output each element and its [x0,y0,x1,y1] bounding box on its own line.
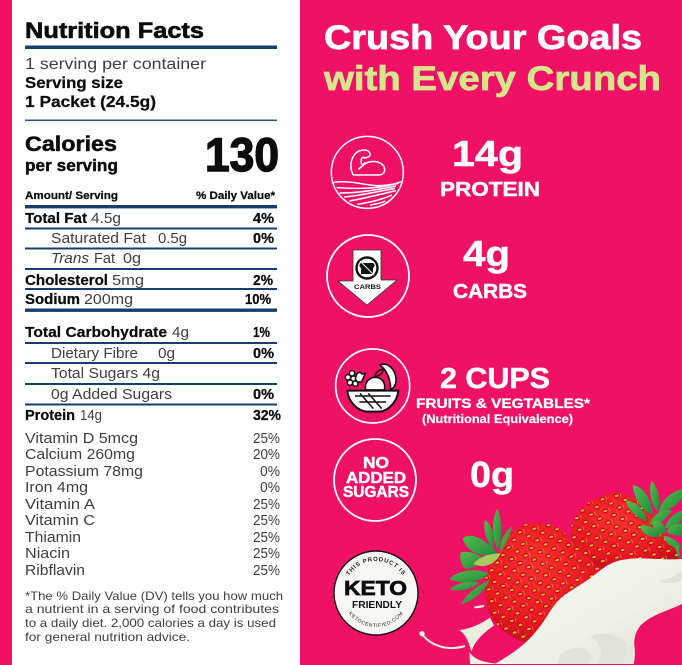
nutrient rows: 0g Added Sugars [51,387,172,403]
vitamins and minerals list: Iron 4mg [25,480,88,496]
nutrient rows: Saturated Fat [51,231,146,247]
footnote [25,589,283,644]
icon: no added sugars: NO [363,455,389,472]
vitamins and minerals list: 25% [253,431,280,447]
stat: 4g carbs: 4g [463,233,510,274]
back strawberry [571,493,679,568]
vitamins and minerals list: Vitamin C [25,513,95,529]
badge: keto friendly [333,550,419,636]
icon: carbs down arrow: CARBS [354,284,382,291]
footnote: for general nutrition advice. [25,630,190,644]
vitamins and minerals list: 25% [253,513,280,529]
calories [25,128,279,181]
nutrient rows: 32% [253,408,281,424]
stat: 4g carbs: CARBS [453,281,527,303]
nutrient rows: 0g [123,251,141,267]
nutrient rows [25,211,281,424]
vitamins and minerals list: 25% [253,546,280,562]
stat: 2 cups fruits and vegetables [416,363,591,426]
column headers [25,190,276,202]
vitamins and minerals list: Vitamin A [25,497,95,513]
serving information: 1 Packet (24.5g) [25,94,156,111]
nutrient rows: 10% [245,292,271,308]
stat: 4g carbs [453,233,527,303]
illustration: strawberries and milk splash [419,481,682,664]
nutrient rows: 5mg [112,273,144,289]
icon: no added sugars: ADDED [346,470,406,487]
title: crush your goals [323,19,661,98]
stat: 2 cups fruits and vegetables: (Nutritional Equivalence) [422,414,573,426]
nutrient rows: Total Carbohydrate [25,325,167,341]
vitamins and minerals list: 25% [253,497,280,513]
nutrient rows: 4.5g [91,211,121,227]
stat: 2 cups fruits and vegetables: FRUITS & VEGTABLES* [416,396,591,411]
calories: per serving [25,157,118,175]
footnote: to a daily diet. 2,000 calories a day is used [25,616,276,630]
front strawberry [485,523,599,642]
milk shadow detail [557,572,682,664]
serving information [25,56,207,111]
calories: Calories [25,132,117,156]
badge: keto friendly: FRIENDLY [352,599,402,611]
vitamins and minerals list [25,431,280,579]
footnote: a nutrient in a serving of food contributes [25,602,279,616]
badge: keto friendly: THIS PRODUCT IS [346,556,406,575]
footnote: *The % Daily Value (DV) tells you how much [25,589,283,603]
nutrient rows: 0% [253,387,274,403]
vitamins and minerals list: Thiamin [25,530,81,546]
panel: nutrition facts [12,0,300,665]
vitamins and minerals list: 0% [260,464,280,480]
nutrient rows: 0g [158,346,175,362]
nutrient rows: Protein [25,408,75,424]
nutrient rows: 14g [80,408,102,424]
front strawberry leaves [449,508,512,604]
stat: 14g protein: 14g [452,133,523,174]
heading: nutrition facts: Nutrition Facts [25,18,204,43]
nutrient rows: 200mg [84,292,133,308]
nutrient rows: 0% [253,346,274,362]
nutrient rows: Total Fat [25,211,87,227]
nutrient rows: Fat [94,251,115,267]
calories: 130 [205,128,279,181]
milk left splash [419,605,500,664]
vitamins and minerals list: Ribflavin [25,563,85,579]
nutrient rows: 4g [172,325,189,341]
stat: 2 cups fruits and vegetables: 2 CUPS [440,363,550,395]
icon: no added sugars: SUGARS [343,484,409,501]
nutrient rows: Trans [51,251,89,267]
stat: 0g: 0g [470,454,514,495]
vitamins and minerals list: 25% [253,530,280,546]
nutrient rows: Sodium [25,292,80,308]
badge: keto friendly: KETOCENTIFIED.COM [348,611,403,627]
vitamins and minerals list: Niacin [25,546,70,562]
icon: muscle and field [331,136,403,208]
icon: fruit bowl [336,349,410,423]
milk splash [495,558,682,664]
nutrient rows: 0% [253,231,274,247]
icon: carbs down arrow [327,235,409,317]
nutrient rows: 2% [253,273,273,289]
column headers: Amount/ Serving [25,190,118,202]
badge: keto friendly: KETO [344,577,407,600]
stat: 14g protein [440,133,540,201]
nutrient rows: 1% [253,325,270,341]
icon: no added sugars [334,439,416,521]
title: crush your goals: with Every Crunch [323,60,661,98]
nutrient rows: 4% [253,211,274,227]
stat: 14g protein: PROTEIN [440,179,540,201]
back strawberry leaves [626,481,682,558]
vitamins and minerals list: 25% [253,563,280,579]
column headers: % Daily Value* [196,190,276,202]
nutrient rows: 0.5g [158,231,187,247]
vitamins and minerals list: Vitamin D 5mcg [25,431,138,447]
serving information: Serving size [25,75,123,92]
vitamins and minerals list: Calcium 260mg [25,447,135,463]
title: crush your goals: Crush Your Goals [324,19,642,57]
vitamins and minerals list: 20% [253,447,280,463]
nutrient rows: Cholesterol [25,273,108,289]
nutrient rows: Dietary Fibre [51,346,138,362]
vitamins and minerals list: 0% [260,480,280,496]
vitamins and minerals list: Potassium 78mg [25,464,143,480]
serving information: 1 serving per container [25,56,207,73]
nutrient rows: Total Sugars 4g [51,366,160,382]
